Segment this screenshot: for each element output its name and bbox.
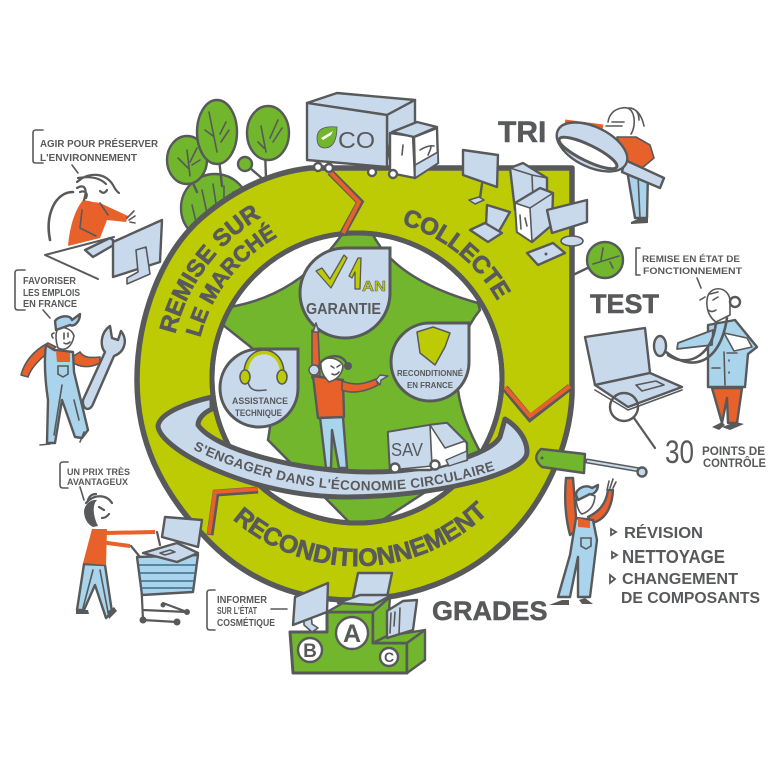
truck box top — [307, 93, 415, 115]
tower — [387, 600, 417, 638]
circular economy ring — [134, 165, 575, 602]
second monitor — [547, 200, 587, 246]
chair — [49, 192, 73, 240]
legs — [77, 564, 112, 618]
SAV van — [388, 423, 467, 472]
callout favoriser — [15, 270, 80, 318]
label grades: GRADES — [432, 596, 548, 626]
head — [321, 358, 343, 382]
badge: assistance technique: ASSISTANCE — [232, 396, 288, 406]
label remise sur: REMISE SUR — [159, 206, 262, 334]
tree right — [238, 106, 289, 180]
callout informer: SUR L'ÉTAT — [217, 605, 257, 617]
callout informer — [207, 590, 287, 630]
truck box end — [387, 100, 415, 160]
headset — [240, 350, 287, 391]
overalls — [558, 518, 597, 597]
grade B: B — [303, 641, 317, 662]
woman at desk — [45, 175, 162, 284]
orange connector bottom left — [209, 489, 258, 535]
eco logo: CO — [338, 127, 375, 153]
30 points de contrôle: POINTS DE — [702, 444, 765, 458]
callout prix: AVANTAGEUX — [67, 477, 129, 488]
raised arm — [312, 330, 320, 378]
callout remise en état: FONCTIONNEMENT — [643, 266, 742, 277]
changement de composants: CHANGEMENT — [622, 571, 739, 588]
hand — [127, 211, 135, 223]
keyboard — [85, 238, 117, 257]
badge: garantie: GARANTIE — [306, 301, 381, 318]
ribbon label: S'ENGAGER DANS L'ÉCONOMIE CIRCULAIRE — [194, 442, 495, 490]
label le marché: LE MARCHÉ — [186, 222, 278, 337]
legs — [627, 170, 648, 218]
callout agir: AGIR POUR PRÉSERVER — [40, 137, 158, 150]
30 points de contrôle — [665, 434, 766, 470]
legs — [712, 388, 742, 423]
raised arm — [565, 478, 577, 535]
wrench — [83, 326, 125, 409]
jacket — [313, 376, 344, 418]
arm — [565, 122, 603, 127]
head — [576, 492, 595, 514]
central support person — [309, 323, 388, 472]
desk — [45, 237, 114, 279]
clipboard — [724, 333, 752, 351]
badge: reconditionné en France: RECONDITIONNÉ — [397, 368, 463, 378]
tree left — [167, 136, 207, 192]
head — [56, 328, 74, 349]
head — [84, 494, 113, 527]
worker with wrench — [21, 314, 125, 445]
stethoscope — [660, 318, 727, 363]
small tree right — [575, 242, 623, 278]
label tri: TRI — [498, 116, 546, 149]
shirt — [83, 529, 107, 565]
head — [77, 175, 119, 202]
sorting person with magnifier — [549, 108, 664, 224]
other arm — [588, 490, 613, 523]
arm — [677, 330, 713, 349]
callout remise en état — [636, 248, 742, 288]
orange connector top — [330, 172, 360, 233]
laptop — [162, 517, 202, 547]
body — [68, 200, 128, 246]
arms — [21, 343, 56, 377]
truck box side — [307, 103, 387, 167]
inner white circle — [212, 233, 502, 523]
pointing arm — [342, 379, 378, 392]
magnifier ring — [610, 393, 638, 421]
orange connector right — [505, 386, 570, 418]
process list — [610, 523, 760, 607]
callout remise en état: REMISE EN ÉTAT DE — [642, 254, 740, 265]
monitor — [293, 583, 328, 632]
monitor — [463, 150, 498, 204]
head — [707, 289, 730, 322]
screwdriver — [587, 461, 640, 470]
label reconditionnement: RECONDITIONNEMENT — [233, 500, 484, 566]
coat details — [712, 352, 737, 385]
callout prix: UN PRIX TRÈS — [67, 466, 131, 478]
badge: assistance technique — [220, 349, 298, 427]
badge: assistance technique: TECHNIQUE — [235, 408, 282, 418]
30 points de contrôle: 30 — [665, 434, 694, 470]
badge: garantie — [300, 248, 390, 338]
ribbon — [156, 394, 530, 500]
laptop — [338, 573, 392, 605]
arms — [100, 532, 155, 546]
head — [606, 108, 644, 135]
SAV van: SAV — [391, 440, 423, 460]
coat — [708, 320, 757, 387]
overalls — [45, 345, 88, 443]
cab — [390, 133, 415, 178]
callout favoriser: FAVORISER — [23, 276, 76, 287]
bush — [181, 174, 249, 242]
tower back — [510, 163, 547, 210]
laptop — [470, 205, 510, 242]
cart — [131, 517, 202, 626]
France map — [223, 233, 482, 523]
changement de composants — [610, 571, 760, 607]
grades podium — [290, 573, 425, 673]
eco truck — [307, 93, 438, 178]
badge: reconditionné en France — [391, 323, 469, 401]
badge: garantie: AN — [362, 278, 386, 295]
lens — [549, 112, 635, 182]
monitor — [113, 220, 162, 284]
podium body — [290, 612, 407, 673]
callout informer: COSMÉTIQUE — [217, 617, 275, 629]
grade A: A — [343, 620, 361, 648]
shopper with cart — [76, 494, 202, 626]
basket — [137, 555, 198, 595]
one — [349, 258, 361, 289]
doctor — [654, 289, 757, 430]
collected devices — [463, 150, 587, 265]
label collecte: COLLECTE — [404, 210, 512, 300]
callout favoriser: LES EMPLOIS — [23, 288, 80, 299]
badge: reconditionné en France: EN FRANCE — [407, 380, 453, 390]
wheels — [314, 163, 322, 171]
callout informer: INFORMER — [217, 595, 267, 606]
changement de composants: DE COMPOSANTS — [621, 590, 760, 607]
tower front — [515, 188, 553, 242]
callout agir: L'ENVIRONNEMENT — [40, 152, 138, 164]
callout agir — [33, 130, 158, 173]
callout favoriser: EN FRANCE — [23, 299, 77, 310]
callout prix — [60, 462, 131, 500]
grade C: C — [384, 649, 394, 665]
nettoyage: NETTOYAGE — [622, 547, 725, 567]
check mark — [316, 255, 347, 288]
tablet — [527, 243, 565, 265]
trees — [167, 100, 289, 242]
laptop under test — [585, 328, 682, 448]
handle — [622, 160, 664, 188]
body — [617, 137, 654, 168]
révision: RÉVISION — [624, 523, 703, 542]
tree middle — [197, 100, 237, 186]
legs — [320, 417, 347, 468]
mechanic with screwdriver — [536, 449, 646, 605]
label test: TEST — [590, 289, 660, 319]
